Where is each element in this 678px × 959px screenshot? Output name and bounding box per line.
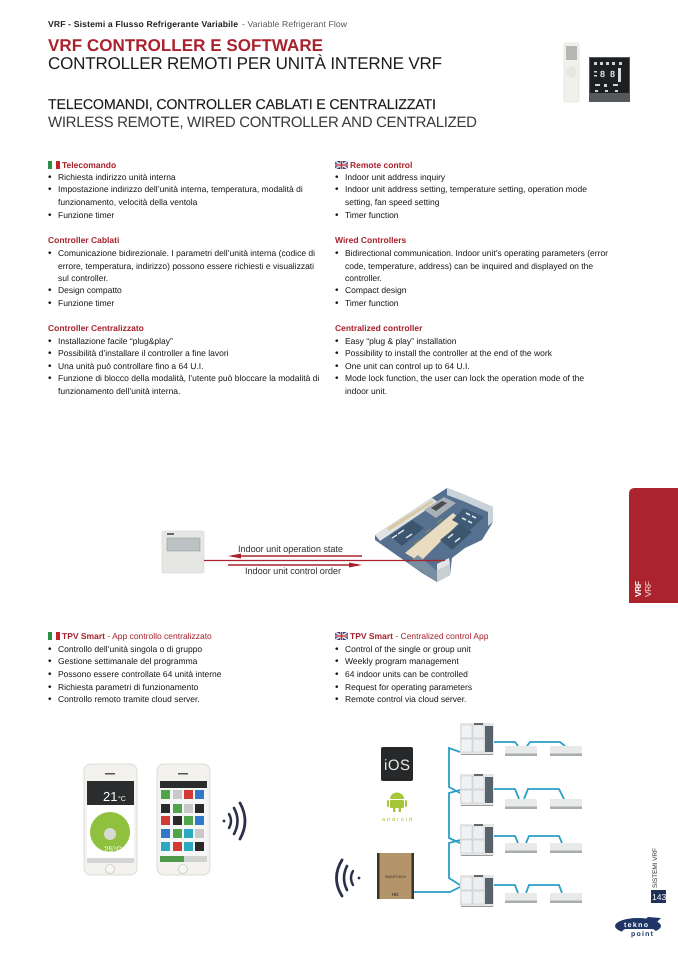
panel: TPV Smart english: •: [335, 682, 339, 693]
panel: TPV Smart italian: Controllo remoto tramite cloud server.: [58, 694, 200, 704]
panel: TPV Smart english: Control of the single or group unit: [345, 644, 471, 654]
icon: wifi signal right: [223, 803, 245, 839]
panel: italian specifications: Controller Cablati: [48, 235, 119, 245]
panel: TPV Smart italian: •: [48, 682, 52, 693]
panel: italian specifications: •: [48, 248, 52, 259]
title: [48, 36, 442, 73]
panel: italian specifications: Funzione timer: [58, 210, 114, 220]
panel: english specifications: Easy “plug & play” installation: [345, 336, 457, 346]
icon: wifi signal left: [336, 860, 360, 896]
indoor units: [505, 746, 582, 903]
diagram: VRF network: [414, 723, 582, 907]
panel: english specifications: Bidirectional communication. Indoor unit’s operating parameters (error: [345, 248, 608, 258]
panel: english specifications: Possibility to install the controller at the end of the work: [345, 348, 553, 358]
panel: english specifications: •: [335, 336, 339, 347]
panel: italian specifications: •: [48, 184, 52, 195]
panel: TPV Smart english: 64 indoor units can be controlled: [345, 669, 468, 679]
panel: italian specifications: Richiesta indirizzo unità interna: [58, 172, 176, 182]
panel: italian specifications: •: [48, 336, 52, 347]
panel: italian specifications: errore, temperatura, indirizzo) possono essere richiesti e visualizzati: [58, 261, 314, 271]
side label: sistemi VRF: SISTEMI VRF: [652, 848, 659, 888]
panel: TPV Smart english: •: [335, 669, 339, 680]
panel: english specifications: One unit can control up to 64 U.I.: [345, 361, 470, 371]
panel: italian specifications: [48, 160, 319, 396]
connection lines: [414, 742, 565, 893]
panel: english specifications: Remote control: [350, 160, 412, 170]
panel: italian specifications: Comunicazione bidirezionale. I parametri dell’unità interna (codice di: [58, 248, 315, 258]
panel: english specifications: •: [335, 348, 339, 359]
icon: phone with remote grid app: [157, 764, 210, 875]
panel: TPV Smart english: TPV Smart - Centralized control App: [350, 631, 489, 641]
panel: TPV Smart italian: •: [48, 656, 52, 667]
arrow: indoor unit operation state: [228, 554, 362, 558]
panel: english specifications: •: [335, 298, 339, 309]
panel: english specifications: Wired Controllers: [335, 235, 407, 245]
panel: italian specifications: Impostazione indirizzo dell’unità interna, temperatura, modalità di: [58, 184, 303, 194]
label: operation state: Indoor unit operation state: [238, 544, 343, 554]
icon: phone with thermostat app: [84, 764, 137, 875]
panel: TPV Smart italian: TPV Smart - App controllo centralizzato: [62, 631, 212, 641]
panel: TPV Smart english: Weekly program management: [345, 656, 459, 666]
breadcrumb header: [48, 19, 348, 29]
panel: italian specifications: sul controller.: [58, 273, 108, 283]
panel: english specifications: •: [335, 172, 339, 183]
panel: english specifications: •: [335, 210, 339, 221]
panel: italian specifications: Funzione timer: [58, 298, 114, 308]
title: CONTROLLER REMOTI PER UNITÀ INTERNE VRF: [48, 54, 442, 73]
panel: english specifications: •: [335, 184, 339, 195]
panel: TPV Smart italian: Richiesta parametri di funzionamento: [58, 682, 199, 692]
side tab: VRF: VRF: [643, 581, 653, 597]
panel: english specifications: •: [335, 373, 339, 384]
logo: tekno point: [615, 917, 661, 938]
icon: italian flag: [48, 161, 60, 169]
icon: italian flag: [48, 632, 60, 640]
panel: TPV Smart italian: Controllo dell’unità singola o di gruppo: [58, 644, 202, 654]
icon: iOS badge: [381, 747, 413, 781]
panel: english specifications: indoor unit.: [345, 386, 387, 396]
panel: english specifications: •: [335, 361, 339, 372]
panel: TPV Smart italian: •: [48, 669, 52, 680]
label: control order: Indoor unit control order: [245, 566, 341, 576]
outdoor units: [460, 723, 494, 907]
icon: remote control and wall controller: [564, 43, 630, 102]
panel: TPV Smart italian: [48, 631, 222, 705]
panel: italian specifications: •: [48, 373, 52, 384]
panel: italian specifications: Telecomando: [62, 160, 116, 170]
panel: english specifications: Compact design: [345, 285, 407, 295]
panel: TPV Smart english: •: [335, 694, 339, 705]
panel: italian specifications: Possibilità d’installare il controller a fine lavori: [58, 348, 229, 358]
icon: remote control and wall controller: 88: [600, 69, 615, 79]
connection line: [204, 560, 445, 562]
panel: italian specifications: Design compatto: [58, 285, 122, 295]
diagram: controller to building communication: [162, 488, 493, 582]
panel: italian specifications: Una unità può controllare fino a 64 U.I.: [58, 361, 204, 371]
panel: english specifications: Timer function: [345, 210, 399, 220]
panel: TPV Smart english: Remote control via cloud server.: [345, 694, 466, 704]
title: VRF CONTROLLER E SOFTWARE: [48, 36, 323, 55]
icon: iOS badge: iOS: [384, 757, 410, 774]
side tab: VRF: [629, 488, 678, 603]
panel: italian specifications: funzionamento, velocità della ventola: [58, 197, 198, 207]
panel: TPV Smart english: Request for operating parameters: [345, 682, 472, 692]
panel: english specifications: •: [335, 285, 339, 296]
icon: isometric office floor plan: [375, 488, 493, 582]
icon: phone with thermostat app: 25°C: [104, 845, 122, 854]
icon: phone with thermostat app: 21: [103, 789, 117, 804]
section heading: TELECOMANDI, CONTROLLER CABLATI E CENTRALIZZATI: [48, 97, 436, 113]
panel: english specifications: Timer function: [345, 298, 399, 308]
panel: english specifications: Indoor unit address setting, temperature setting, operation mode: [345, 184, 587, 194]
icon: android logo: android: [382, 817, 412, 823]
panel: italian specifications: funzionamento dell’unità interna.: [58, 386, 180, 396]
panel: italian specifications: Controller Centralizzato: [48, 323, 144, 333]
logo: tekno point: tekno: [624, 921, 648, 929]
panel: italian specifications: Funzione di blocco della modalità, l’utente può bloccare la modalità di: [58, 373, 319, 383]
panel: english specifications: •: [335, 248, 339, 259]
panel: italian specifications: •: [48, 210, 52, 221]
panel: italian specifications: •: [48, 172, 52, 183]
logo: tekno point: point: [631, 930, 654, 938]
icon: phone with thermostat app: °C: [118, 796, 126, 803]
section heading: [48, 97, 477, 131]
panel: TPV Smart english: •: [335, 644, 339, 655]
icon: gateway box: HD: [392, 892, 399, 897]
panel: TPV Smart italian: Gestione settimanale del programma: [58, 656, 198, 666]
panel: italian specifications: •: [48, 285, 52, 296]
panel: TPV Smart italian: •: [48, 644, 52, 655]
panel: TPV Smart italian: Possono essere controllate 64 unità interne: [58, 669, 222, 679]
section heading: WIRLESS REMOTE, WIRED CONTROLLER AND CENTRALIZED: [48, 114, 477, 131]
panel: english specifications: Mode lock function, the user can lock the operation mode of the: [345, 373, 584, 383]
icon: uk flag: [335, 161, 348, 169]
panel: TPV Smart italian: •: [48, 694, 52, 705]
breadcrumb header: - Variable Refrigerant Flow: [242, 19, 348, 29]
icon: wired controller: [162, 531, 204, 573]
panel: english specifications: Indoor unit address inquiry: [345, 172, 446, 182]
side tab: VRF: VRF: [633, 581, 643, 597]
panel: TPV Smart english: [335, 631, 489, 705]
panel: english specifications: Centralized controller: [335, 323, 423, 333]
panel: italian specifications: •: [48, 361, 52, 372]
panel: italian specifications: •: [48, 348, 52, 359]
page number: 143: [652, 892, 667, 902]
panel: italian specifications: •: [48, 298, 52, 309]
panel: english specifications: code, temperature, address) can be inquired and displayed on the: [345, 261, 593, 271]
panel: english specifications: controller.: [345, 273, 382, 283]
panel: italian specifications: Installazione facile “plug&play”: [58, 336, 173, 346]
icon: android logo: [382, 792, 412, 823]
icon: gateway box: SMART-BOX: [385, 875, 407, 879]
panel: TPV Smart english: •: [335, 656, 339, 667]
breadcrumb header: VRF - Sistemi a Flusso Refrigerante Variabile: [48, 19, 238, 29]
arrow: indoor unit control order: [228, 562, 362, 568]
panel: english specifications: [335, 160, 608, 396]
panel: english specifications: setting, fan speed setting: [345, 197, 440, 207]
icon: gateway box: [377, 853, 414, 899]
icon: uk flag: [335, 632, 348, 640]
